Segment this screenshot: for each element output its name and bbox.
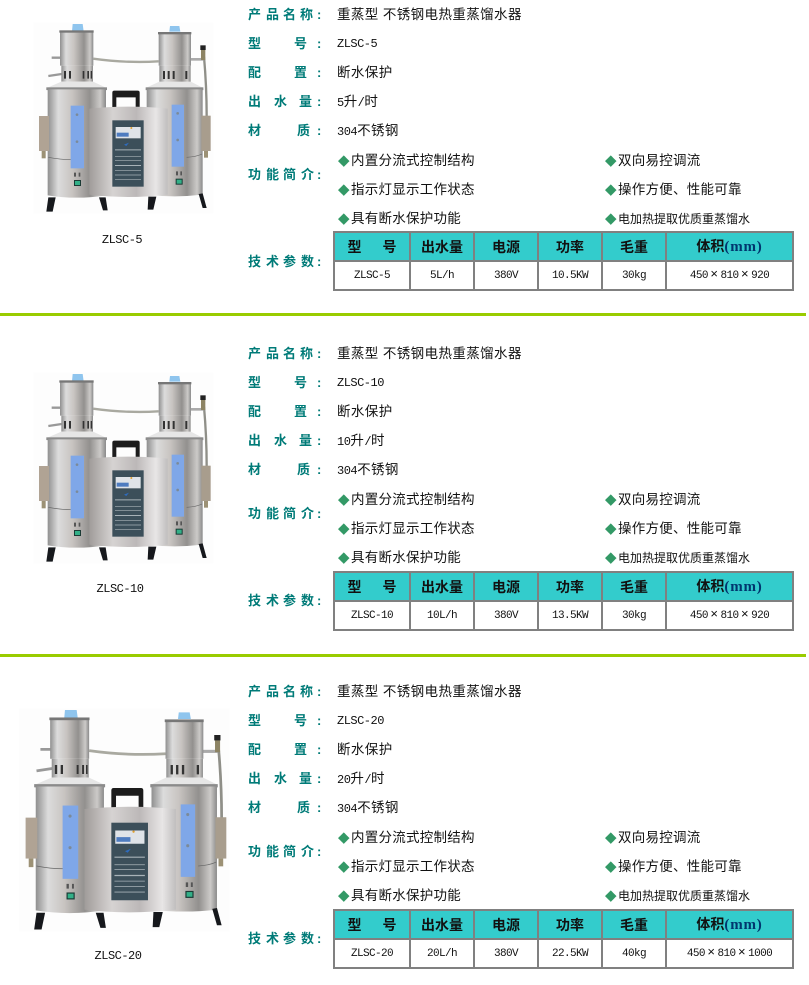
feature: ◆ <box>338 490 350 508</box>
label: product name: 产 <box>248 684 261 699</box>
feature: ◆ <box>338 886 350 904</box>
label: product name: : <box>317 7 321 22</box>
table: specifications: 5L/h <box>430 270 454 282</box>
value: product name: 重蒸型 不锈钢电热重蒸馏水器 <box>337 346 522 361</box>
label: material: 材 <box>248 462 261 477</box>
feature: 操作方便、性能可靠 <box>618 859 742 874</box>
label: configuration <box>248 404 321 419</box>
label: technical parameters: 数 <box>301 931 314 946</box>
label: technical parameters: 数 <box>301 254 314 269</box>
label: product name: 称 <box>300 684 313 699</box>
label: water output: 水 <box>274 94 287 109</box>
label: material: 材 <box>248 123 261 138</box>
feature: ◆ <box>338 548 350 566</box>
panel: ZLSC-10 <box>39 346 794 631</box>
label: model: 型 <box>248 713 261 728</box>
table: specifications: 380V <box>494 270 518 282</box>
feature: 具有断水保护功能 <box>351 888 461 903</box>
label: configuration <box>248 65 321 80</box>
label: features <box>248 845 322 859</box>
table: specifications <box>333 909 794 969</box>
table: specifications: 22.5KW <box>552 948 588 960</box>
table: specifications: 毛重 <box>620 578 648 594</box>
label: configuration: 配 <box>248 742 261 757</box>
label: features: 简 <box>283 167 296 182</box>
feature: ◆ <box>605 490 617 508</box>
label: model <box>248 713 321 728</box>
label: technical parameters: : <box>317 931 321 946</box>
label: model: : <box>317 375 321 390</box>
label: configuration: 置 <box>294 65 307 80</box>
product photo: ZLSC-10 distiller <box>39 374 211 562</box>
label: product name: 品 <box>266 346 279 361</box>
label: configuration: : <box>317 65 321 80</box>
label: features <box>248 506 321 521</box>
caption: ZLSC-20: ZLSC-20 <box>95 949 141 963</box>
label: technical parameters: 技 <box>248 593 261 608</box>
feature: 内置分流式控制结构 <box>351 830 475 845</box>
feature: ◆ <box>605 548 617 566</box>
table: specifications: 10.5KW <box>552 270 588 282</box>
divider <box>0 654 806 657</box>
value: model: ZLSC-10 <box>337 376 384 390</box>
label: features: 介 <box>301 167 314 182</box>
table: specifications: 10L/h <box>427 610 457 622</box>
label: product name: 产 <box>248 7 261 22</box>
table: specifications: 电源 <box>492 916 520 932</box>
feature: ◆ <box>605 519 617 537</box>
label: features: 能 <box>266 167 279 182</box>
label: model: : <box>317 36 321 51</box>
feature: ◆ <box>605 886 617 904</box>
label: material: : <box>317 123 321 138</box>
table: specifications: 出水量 <box>421 578 463 594</box>
label: model: 型 <box>248 375 261 390</box>
feature: 指示灯显示工作状态 <box>351 521 475 536</box>
feature: 双向易控调流 <box>618 830 700 845</box>
label: features: 功 <box>248 167 261 182</box>
feature: 双向易控调流 <box>618 153 700 168</box>
feature: ◆ <box>338 180 350 198</box>
feature: ◆ <box>338 519 350 537</box>
table: specifications: 型 号 <box>348 238 396 254</box>
label: product name: : <box>317 684 321 699</box>
feature: 电加热提取优质重蒸馏水 <box>618 889 750 903</box>
label: water output: : <box>317 94 321 109</box>
value: model: ZLSC-20 <box>337 714 384 728</box>
label: technical parameters <box>248 254 321 269</box>
feature: 内置分流式控制结构 <box>351 492 475 507</box>
table: specifications: 出水量 <box>421 916 463 932</box>
label: configuration: 置 <box>294 742 307 757</box>
table: specifications: ZLSC-5 <box>354 270 390 282</box>
table: specifications: 380V <box>494 948 518 960</box>
label: water output: 水 <box>274 771 287 786</box>
label: model: 型 <box>248 36 261 51</box>
table: specifications: 13.5KW <box>552 610 588 622</box>
label: technical parameters: : <box>317 254 321 269</box>
label: product name <box>248 7 321 22</box>
table: specifications: 40kg <box>622 948 646 960</box>
label: water output: 出 <box>248 94 261 109</box>
label: model <box>248 375 321 390</box>
table: specifications: 出水量 <box>421 238 463 254</box>
label: technical parameters: 术 <box>266 254 279 269</box>
feature: 指示灯显示工作状态 <box>351 182 475 197</box>
label: product name: 品 <box>266 7 279 22</box>
feature: 操作方便、性能可靠 <box>618 182 742 197</box>
label: technical parameters: : <box>317 593 321 608</box>
value: material: 304不锈钢 <box>337 123 399 139</box>
panel: ZLSC-5 <box>39 7 794 291</box>
label: product name: 称 <box>300 7 313 22</box>
table: specifications: 450×810×1000 <box>687 944 772 960</box>
label: technical parameters: 数 <box>301 593 314 608</box>
label: material <box>248 123 321 138</box>
feature: 电加热提取优质重蒸馏水 <box>618 551 750 565</box>
value: water output: 20升/时 <box>337 771 385 787</box>
table: specifications <box>333 231 794 291</box>
feature: 双向易控调流 <box>618 492 700 507</box>
feature: ◆ <box>605 857 617 875</box>
value: water output: 10升/时 <box>337 433 385 449</box>
feature: 具有断水保护功能 <box>351 550 461 565</box>
product photo: ZLSC-20 distiller <box>26 710 226 930</box>
table: specifications: 450×810×920 <box>690 266 769 282</box>
value: product name: 重蒸型 不锈钢电热重蒸馏水器 <box>337 7 522 22</box>
label: model: 号 <box>294 713 307 728</box>
label: water output: 量 <box>299 771 312 786</box>
feature: ◆ <box>605 180 617 198</box>
panel: ZLSC-20 <box>26 684 794 969</box>
label: features: 简 <box>283 844 296 859</box>
label: material: : <box>317 462 321 477</box>
divider <box>0 313 806 316</box>
label: material: : <box>317 800 321 815</box>
feature: ◆ <box>605 209 617 227</box>
label: configuration: : <box>317 404 321 419</box>
label: product name: 名 <box>283 7 296 22</box>
table: specifications: 380V <box>494 610 518 622</box>
label: features: : <box>317 506 321 521</box>
table: specifications: 体积(mm) <box>696 916 763 933</box>
label: technical parameters: 技 <box>248 254 261 269</box>
label: technical parameters: 参 <box>283 254 296 269</box>
table: specifications: 电源 <box>492 578 520 594</box>
feature: 指示灯显示工作状态 <box>351 859 475 874</box>
label: product name: 品 <box>266 684 279 699</box>
label: material <box>248 462 321 477</box>
label: model: 号 <box>294 36 307 51</box>
label: features: 功 <box>248 844 261 859</box>
table: specifications: 450×810×920 <box>690 606 769 622</box>
label: configuration: 置 <box>294 404 307 419</box>
label: product name <box>248 684 321 699</box>
label: configuration <box>248 742 321 757</box>
caption: ZLSC-5: ZLSC-5 <box>102 233 142 247</box>
table: specifications: 体积(mm) <box>696 238 763 255</box>
label: product name: 名 <box>283 684 296 699</box>
label: water output: 出 <box>248 433 261 448</box>
label: features: 功 <box>248 506 261 521</box>
table: specifications: 功率 <box>556 578 584 594</box>
table: specifications: 功率 <box>556 238 584 254</box>
label: technical parameters: 术 <box>266 931 279 946</box>
label: water output: : <box>317 771 321 786</box>
label: features: 介 <box>301 844 314 859</box>
label: product name: 产 <box>248 346 261 361</box>
label: product name: 名 <box>283 346 296 361</box>
table: specifications: ZLSC-10 <box>351 610 393 622</box>
label: technical parameters <box>248 593 321 608</box>
value: material: 304不锈钢 <box>337 462 399 478</box>
label: water output <box>248 433 321 448</box>
label: model: : <box>317 713 321 728</box>
label: water output <box>248 771 321 786</box>
product photo: ZLSC-5 distiller <box>39 24 211 212</box>
label: material: 质 <box>297 123 310 138</box>
value: material: 304不锈钢 <box>337 800 399 816</box>
label: model: 号 <box>294 375 307 390</box>
label: water output: 出 <box>248 771 261 786</box>
table: specifications: 电源 <box>492 238 520 254</box>
feature: ◆ <box>338 857 350 875</box>
feature: ◆ <box>605 151 617 169</box>
table: specifications: ZLSC-20 <box>351 948 393 960</box>
label: product name: 称 <box>300 346 313 361</box>
label: water output: : <box>317 433 321 448</box>
label: technical parameters: 技 <box>248 931 261 946</box>
value: configuration: 断水保护 <box>337 742 393 757</box>
table: specifications: 型 号 <box>348 916 396 932</box>
table: specifications: 毛重 <box>620 238 648 254</box>
label: material: 材 <box>248 800 261 815</box>
table: specifications: 体积(mm) <box>696 578 763 595</box>
feature: 内置分流式控制结构 <box>351 153 475 168</box>
label: technical parameters <box>248 932 322 946</box>
label: material: 质 <box>297 800 310 815</box>
value: model: ZLSC-5 <box>337 37 377 51</box>
feature: ◆ <box>338 828 350 846</box>
label: features: 介 <box>301 506 314 521</box>
value: product name: 重蒸型 不锈钢电热重蒸馏水器 <box>337 684 522 699</box>
feature: 操作方便、性能可靠 <box>618 521 742 536</box>
label: material: 质 <box>297 462 310 477</box>
value: configuration: 断水保护 <box>337 404 393 419</box>
label: water output <box>248 94 321 109</box>
label: features <box>248 167 321 182</box>
label: configuration: : <box>317 742 321 757</box>
label: water output: 量 <box>299 94 312 109</box>
label: model <box>248 36 321 51</box>
label: configuration: 配 <box>248 65 261 80</box>
caption: ZLSC-10: ZLSC-10 <box>97 582 143 596</box>
feature: ◆ <box>338 151 350 169</box>
label: technical parameters: 参 <box>283 931 296 946</box>
table: specifications: 毛重 <box>620 916 648 932</box>
label: features: : <box>317 167 321 182</box>
label: configuration: 配 <box>248 404 261 419</box>
table: specifications: 30kg <box>622 270 646 282</box>
feature: 电加热提取优质重蒸馏水 <box>618 212 750 226</box>
table: specifications: 30kg <box>622 610 646 622</box>
label: technical parameters: 参 <box>283 593 296 608</box>
feature: 具有断水保护功能 <box>351 211 461 226</box>
table: specifications: 型 号 <box>348 578 396 594</box>
label: features: 简 <box>283 506 296 521</box>
label: features: 能 <box>266 506 279 521</box>
table: specifications: 功率 <box>556 916 584 932</box>
label: product name <box>248 346 321 361</box>
feature: ◆ <box>338 209 350 227</box>
label: features: 能 <box>266 844 279 859</box>
value: configuration: 断水保护 <box>337 65 393 80</box>
label: water output: 水 <box>274 433 287 448</box>
feature: ◆ <box>605 828 617 846</box>
table: specifications: 20L/h <box>427 948 457 960</box>
label: technical parameters: 术 <box>266 593 279 608</box>
value: water output: 5升/时 <box>337 94 378 110</box>
label: material <box>248 801 322 815</box>
label: water output: 量 <box>299 433 312 448</box>
label: features: : <box>317 844 321 859</box>
label: product name: : <box>317 346 321 361</box>
table: specifications <box>333 571 794 631</box>
